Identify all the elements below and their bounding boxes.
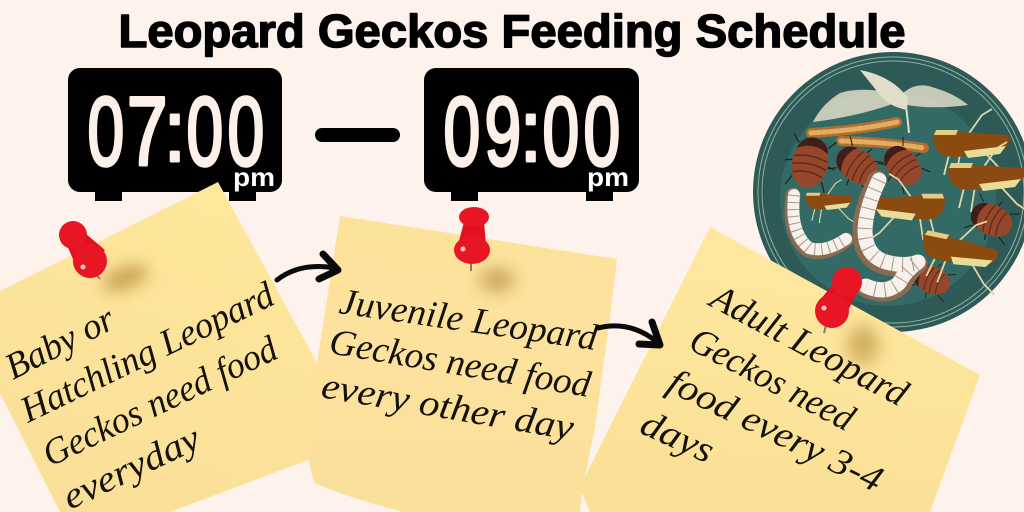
dash between times <box>315 128 400 142</box>
icon: mealworms <box>811 122 924 148</box>
clock: 09:00 pm: pm <box>587 162 629 192</box>
icon: grasshoppers <box>804 109 1024 294</box>
pushpin: third note <box>815 267 862 333</box>
clock: 07:00 pm <box>68 68 282 201</box>
title: Leopard Geckos Feeding Schedule <box>118 5 906 57</box>
clock: 07:00 pm: 0 <box>88 77 124 186</box>
clock: 07:00 pm: 0 <box>186 77 223 186</box>
pushpin: second note <box>454 207 490 271</box>
arrow: first to second note <box>277 254 338 280</box>
insect plate illustration <box>753 52 1024 332</box>
note text: Hatchling Leopard <box>13 274 281 432</box>
note text: Adult Leopard <box>701 275 915 415</box>
clock: 09:00 pm: : <box>520 82 542 180</box>
icon: moth <box>813 70 968 133</box>
clock: 09:00 pm <box>424 68 639 201</box>
note text: Geckos need food <box>326 321 594 406</box>
note text: every other day <box>318 365 577 449</box>
icon: white grubs <box>792 180 918 292</box>
note text: days <box>634 403 720 472</box>
icon: roaches <box>780 132 1021 305</box>
sticky note: juvenile <box>308 216 617 512</box>
clock: 07:00 pm: : <box>164 82 186 180</box>
clock: 09:00 pm: 9 <box>484 77 521 186</box>
clock: 09:00 pm: 0 <box>542 77 579 186</box>
clock: 07:00 pm: pm <box>233 162 275 192</box>
sticky note: baby or hatchling <box>0 182 340 512</box>
clock: 09:00 pm: 0 <box>584 77 620 186</box>
note text <box>318 281 600 449</box>
clock: 07:00 pm: 7 <box>127 78 167 186</box>
note text <box>634 275 915 501</box>
note text: Geckos need <box>683 320 862 440</box>
note text: Baby or <box>0 298 122 388</box>
clock: 09:00 pm: 0 <box>444 77 480 186</box>
clock: 07:00 pm: 0 <box>228 77 264 186</box>
note text <box>0 274 284 512</box>
note text: Juvenile Leopard <box>337 281 600 359</box>
arrow: second to third note <box>598 322 660 345</box>
pushpin: first note <box>59 221 107 279</box>
note text: Geckos need food <box>36 328 284 475</box>
sticky note: adult <box>580 227 980 512</box>
note text: food every 3-4 <box>661 361 889 501</box>
